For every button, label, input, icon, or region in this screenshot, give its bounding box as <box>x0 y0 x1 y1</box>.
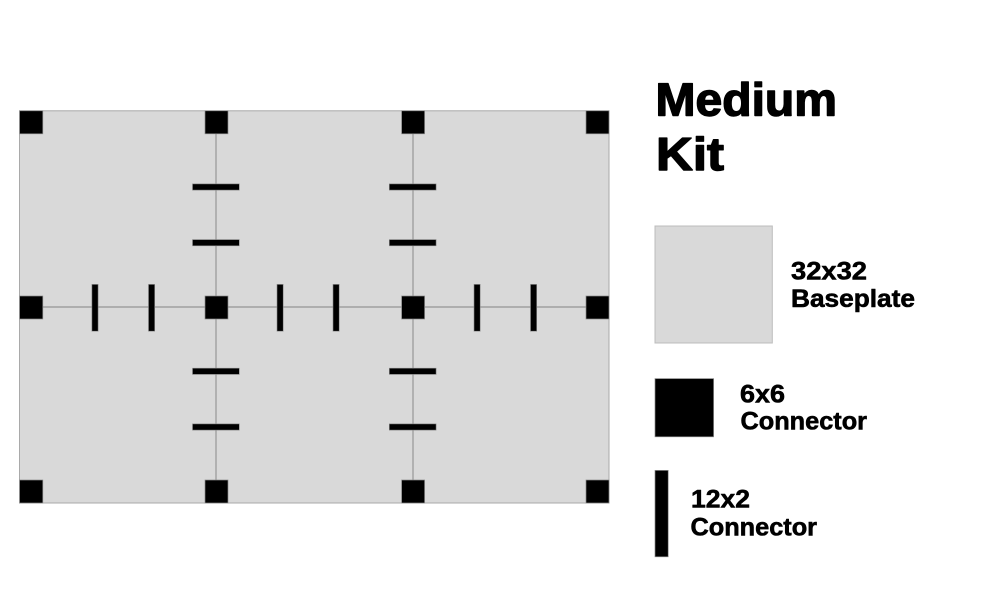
legend: 12x2 connector label: Connector <box>690 514 817 542</box>
legend: 12x2 connector label <box>690 486 817 542</box>
legend: baseplate label: Baseplate <box>791 285 915 313</box>
legend: 12x2 connector swatch <box>655 470 668 557</box>
panel: kit layout diagram <box>20 111 609 503</box>
12x2 connectors horizontal <box>192 184 436 430</box>
legend: 6x6 connector label <box>740 381 867 436</box>
title: Kit <box>656 128 724 180</box>
6x6 connectors <box>20 111 609 503</box>
legend: 6x6 connector label: 6x6 <box>740 381 785 409</box>
title: Medium <box>656 74 837 126</box>
legend: baseplate label <box>791 257 915 313</box>
baseplate seams <box>20 111 609 503</box>
title <box>656 74 837 180</box>
legend: baseplate label: 32x32 <box>791 257 867 285</box>
baseplate grid <box>20 111 609 503</box>
legend: 6x6 connector label: Connector <box>740 408 867 436</box>
12x2 connectors vertical <box>92 284 537 331</box>
legend: 6x6 connector swatch <box>655 379 714 437</box>
legend: baseplate swatch <box>655 226 772 343</box>
legend: 12x2 connector label: 12x2 <box>691 486 750 514</box>
